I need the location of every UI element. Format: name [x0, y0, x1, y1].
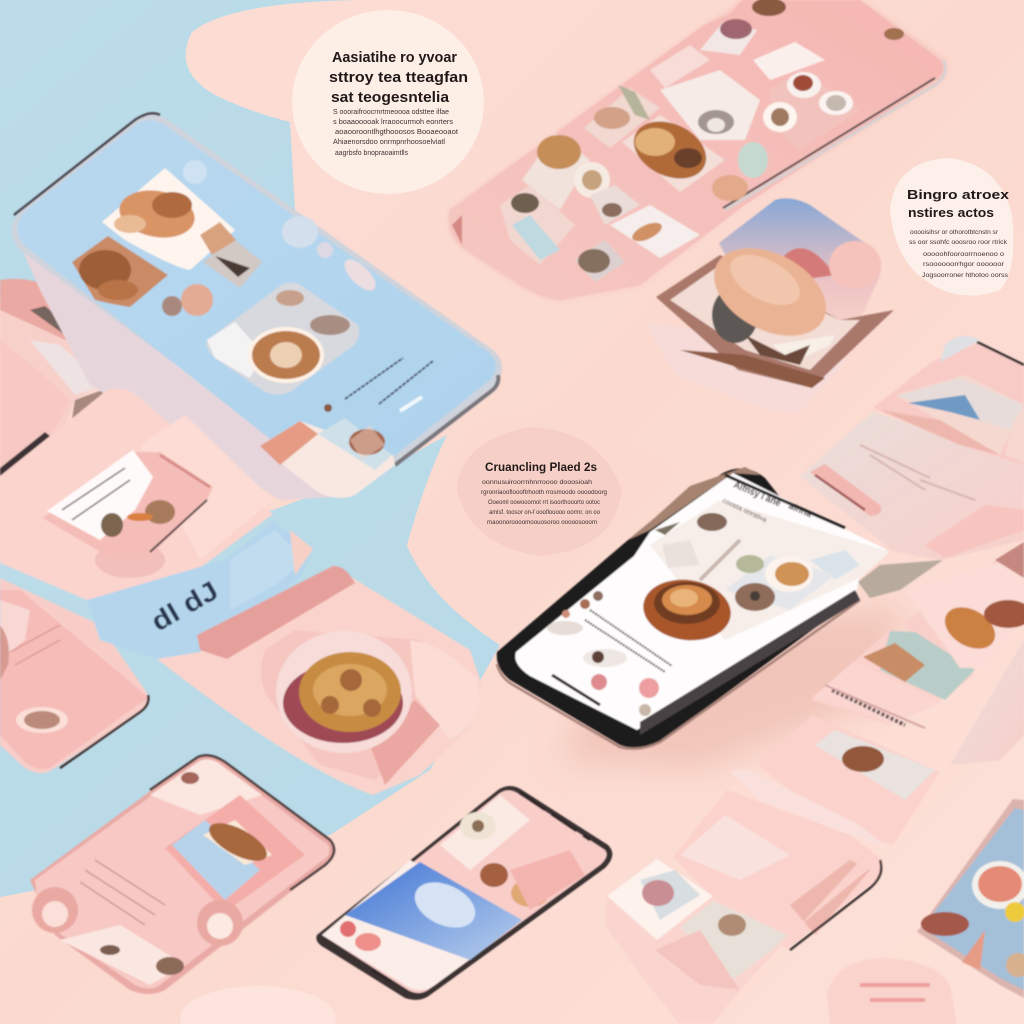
plate cards [72, 168, 262, 316]
dark page stack [640, 590, 860, 735]
pink base on phone [260, 421, 395, 498]
text blob: top headline: sttroy tea tteagfan [329, 69, 468, 86]
text blob: right headline: Bingro atroex [907, 187, 1010, 202]
panel: top right pink phone [449, 0, 946, 300]
text blob: top headline: S oooraifroocrnrtmeoooa odsttee ilfae [333, 109, 449, 116]
panel: bottom center phone [316, 786, 612, 1000]
latte plate [207, 283, 359, 394]
food on center phone [547, 513, 835, 716]
panel: right top folded sheet [800, 336, 1024, 560]
panel: bottom left phone [30, 755, 334, 994]
text blob: bottom right [827, 958, 957, 1024]
panel: right food stack [810, 542, 1024, 765]
text blob: top headline: s boaaooooak lrraoocurmoh eonrters [333, 119, 454, 126]
text blob: center caption: amlsf. toosor on-f oooflooooo oormr. on oo [489, 509, 600, 516]
text blob: right headline [890, 158, 1014, 296]
panel: left edge pink shapes [0, 279, 128, 480]
text blob: right headline: ss oor ssohfc ooosroo roor rtrick [909, 239, 1008, 246]
text blob: top headline: aagrbsfo bnopraoaimtlls [335, 150, 408, 157]
panel: bowl with blue label [87, 521, 482, 795]
text blob: top headline: Aasiatihe ro yvoar [332, 49, 457, 66]
panel: center phone: ainna [787, 501, 814, 520]
panel: burger card [645, 198, 894, 412]
text blob: right headline: ooooisihsr or othorotbtcnstn sr [910, 229, 999, 236]
text blob: center caption: maoonoroooomoouosoroo ooooosooom [487, 519, 597, 526]
panel: left middle card [0, 389, 273, 607]
panel: bottom fold brochure [605, 850, 880, 1024]
decorative blob bottom [180, 986, 336, 1024]
panel: bottom right photo [917, 799, 1024, 998]
text lines on blue phone [345, 358, 433, 404]
food tiles [452, 0, 904, 282]
panel: lower left phone [0, 578, 148, 773]
bowl [276, 631, 412, 753]
blue label text: dl dJ [146, 575, 223, 637]
text blob: top headline [292, 10, 484, 194]
text blob: right headline: Jogsoorroner hthotoo oorss [922, 272, 1009, 279]
text blob: right headline: rsoooooorrhgor oooooor [923, 261, 1005, 268]
text blob: top headline: aoaooroontlhgthooosos Booaeooaot [335, 129, 458, 136]
panel: pink backdrop behind caption [407, 414, 680, 640]
text blob: center caption [457, 427, 622, 556]
panel: center phone: coosta oorstiva [721, 497, 768, 524]
text blob: center caption: Cruancling Plaed 2s [485, 462, 597, 474]
panel: blue phone top left [12, 113, 502, 500]
text blob: top headline: sat teogesntelia [331, 89, 450, 106]
text blob: center caption: Ooeoml oowooornot rrt isoorthooorto ootoc [488, 499, 601, 506]
text blob: right headline: nstires actos [908, 205, 994, 220]
text blob: right headline: ooooohfooroorrnoenoo o [923, 251, 1004, 258]
text blob: top headline: Ahiaenorsdoo onrmpnrhoosoelviatl [333, 139, 445, 146]
text blob: center caption: rgronriaoofloooftrhooth rrosmoodo oooodoorg [481, 489, 607, 496]
panel: folded recipe pages [673, 715, 940, 950]
panel: center phone: Alfnsy l ane [732, 480, 783, 509]
text blob: center caption: oonnusuiroorrnhnrroooo dooosioah [482, 479, 592, 486]
panel: center phone [497, 467, 943, 749]
text lines on center phone [585, 610, 672, 672]
